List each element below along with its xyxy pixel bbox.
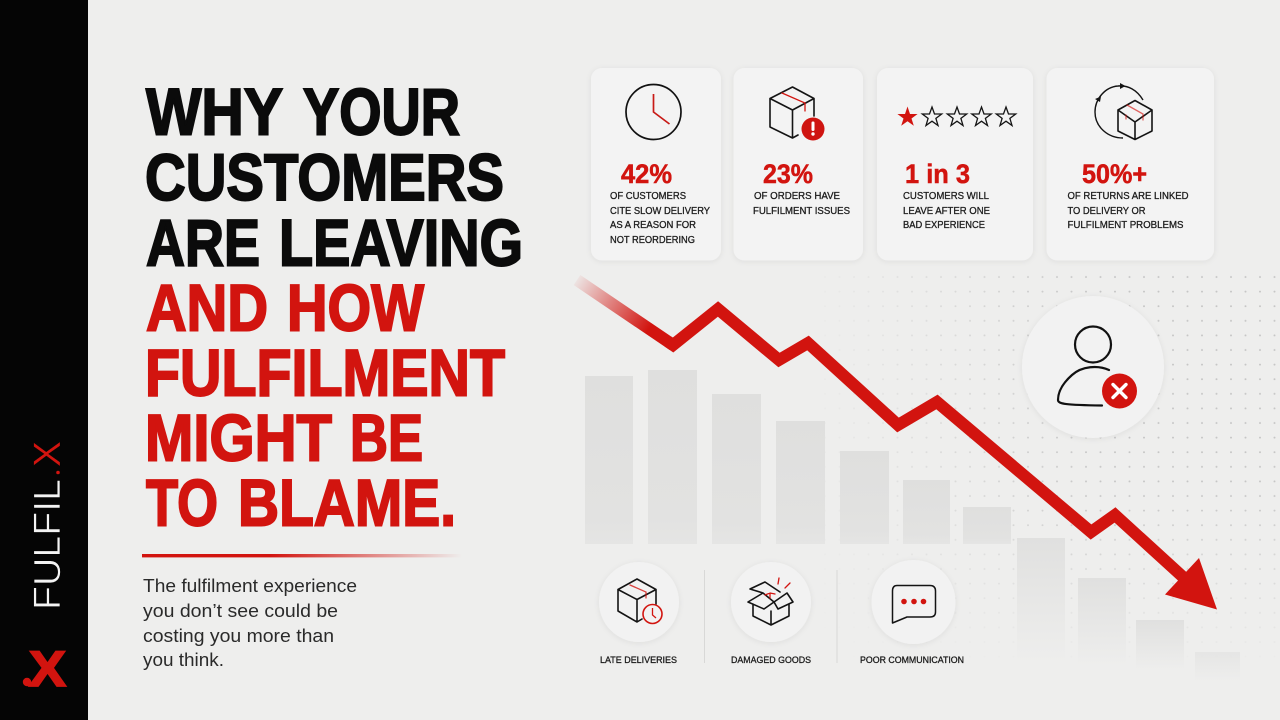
headline (145, 74, 523, 540)
icon: user with cross (1058, 326, 1137, 408)
headline: HOW (287, 270, 425, 344)
stat: 1 in 3: 1 in 3 (905, 159, 970, 189)
panel: slow delivery stat (591, 68, 721, 260)
icon: clock (626, 84, 681, 140)
sidebar with brand (0, 0, 88, 720)
subheading: costing you more than (143, 625, 334, 646)
headline: BLAME. (238, 466, 456, 540)
stat description: TO DELIVERY OR (1068, 206, 1146, 217)
stat description: BAD EXPERIENCE (903, 220, 985, 231)
stat: 42%: 42% (621, 159, 672, 189)
stat description (1068, 191, 1188, 231)
label: POOR COMMUNICATION (860, 655, 964, 666)
dot pattern (868, 276, 1276, 628)
subheading: The fulfilment experience (143, 575, 357, 596)
icon: speech bubble (892, 586, 936, 623)
stat description: CITE SLOW DELIVERY (610, 206, 710, 217)
stat description: LEAVE AFTER ONE (903, 206, 990, 217)
headline: FULFILMENT (145, 336, 505, 410)
panel: returns stat (1046, 68, 1214, 260)
headline: LEAVING (279, 206, 523, 280)
headline: MIGHT (145, 400, 332, 474)
stat description: AS A REASON FOR (610, 220, 696, 231)
stat description (610, 191, 710, 246)
label: LATE DELIVERIES (600, 655, 677, 666)
stat description: FULFILMENT PROBLEMS (1068, 220, 1184, 231)
stat description (753, 191, 850, 217)
icon: box with alert (770, 87, 824, 140)
item: poor communication (860, 560, 964, 666)
item: damaged goods (731, 562, 811, 666)
user lost badge (1022, 296, 1164, 438)
panel: fulfilment issues stat (734, 68, 863, 260)
stat description: OF CUSTOMERS (610, 191, 686, 202)
icon: open damaged box (748, 578, 793, 625)
red rule (142, 554, 462, 557)
stat description: CUSTOMERS WILL (903, 191, 989, 202)
headline: TO (146, 466, 218, 540)
stat: 23%: 23% (763, 159, 813, 189)
stat description: NOT REORDERING (610, 235, 695, 246)
headline: CUSTOMERS (145, 140, 504, 214)
icon: box with return arrows (1095, 83, 1152, 140)
headline: YOUR (303, 74, 460, 148)
brand wordmark: X (27, 441, 69, 467)
icon: box with clock (618, 579, 662, 624)
stat description: FULFILMENT ISSUES (753, 206, 850, 217)
subheading: you think. (143, 649, 224, 670)
icon: one of five stars (897, 106, 1016, 126)
stat description: OF ORDERS HAVE (754, 191, 840, 202)
stat: 50%+: 50%+ (1082, 159, 1147, 189)
headline: AND (146, 270, 268, 344)
declining trend arrow (577, 280, 1217, 610)
brand wordmark: FULFIL (27, 479, 69, 610)
headline: BE (350, 400, 423, 474)
stat description (903, 191, 990, 231)
subheading (143, 575, 357, 670)
stat description: OF RETURNS ARE LINKED (1068, 191, 1188, 202)
headline: ARE (146, 206, 260, 280)
label: DAMAGED GOODS (731, 655, 811, 666)
subheading: you don’t see could be (143, 600, 338, 621)
item: late deliveries (599, 562, 679, 666)
bar chart backdrop (585, 370, 1240, 682)
brand logo: X (29, 641, 66, 697)
headline: WHY (146, 74, 283, 148)
panel: one in three stat (877, 68, 1033, 260)
